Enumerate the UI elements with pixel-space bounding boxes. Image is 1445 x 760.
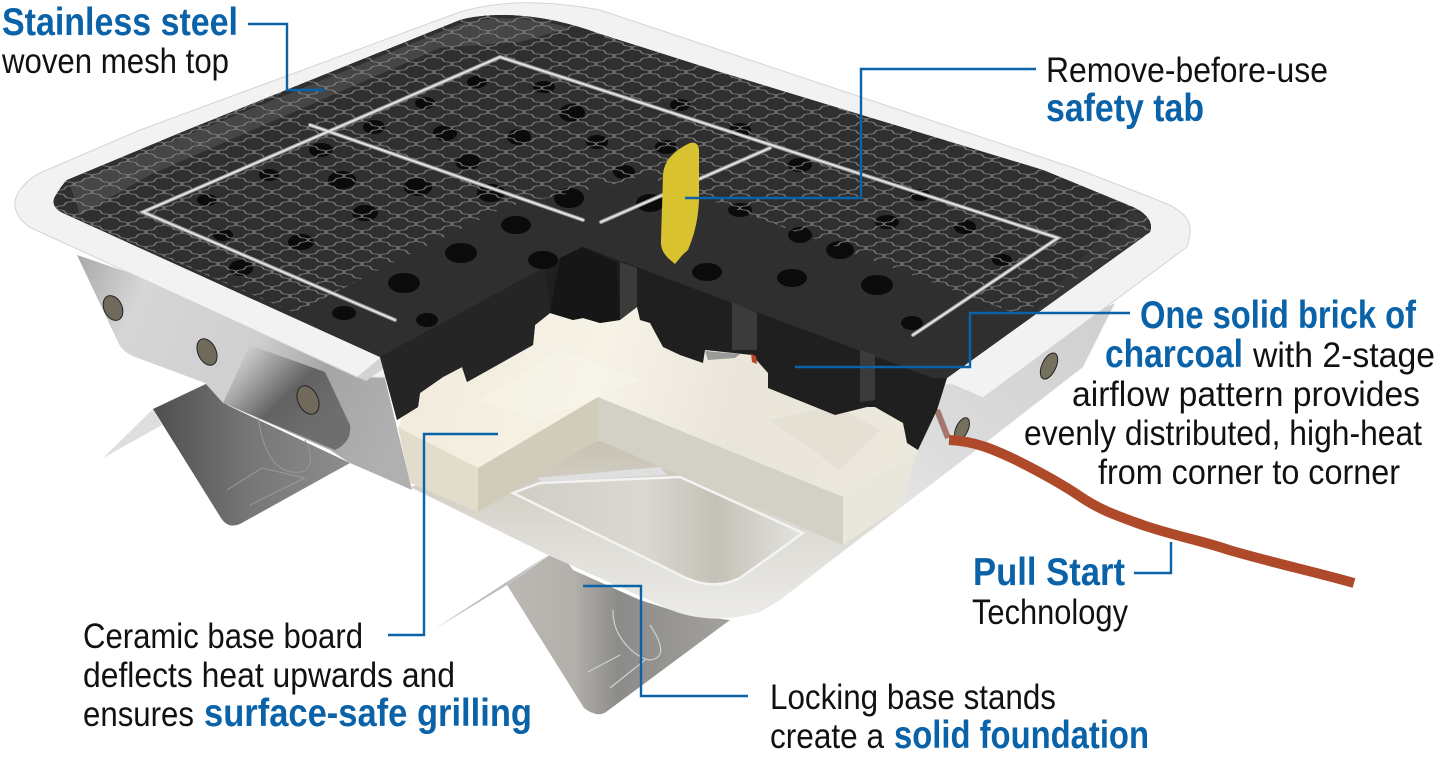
woven mesh top — [55, 16, 1150, 312]
airflow holes — [197, 76, 1012, 330]
callout: charcoal brick — [1024, 294, 1435, 492]
callout: ceramic base board: ensures — [83, 695, 194, 734]
callout: charcoal brick: airflow pattern provides — [1072, 375, 1420, 414]
callout: locking base stands: solid foundation — [894, 714, 1149, 757]
leader line: stainless steel — [248, 24, 325, 90]
leader line: locking base stands — [583, 586, 748, 696]
callout: locking base stands: create a — [770, 717, 884, 756]
left wall vent holes — [99, 292, 323, 418]
callout: locking base stands: Locking base stands — [770, 678, 1056, 717]
callout: pull start: Technology — [972, 593, 1128, 632]
charcoal brick — [54, 15, 1151, 450]
rim end highlight — [357, 358, 384, 381]
rim — [15, 3, 1190, 398]
callout: stainless steel: Stainless steel — [2, 1, 238, 44]
callout: safety tab — [1046, 51, 1328, 130]
callout: ceramic base board: surface-safe grilling — [204, 692, 532, 735]
callout: charcoal brick: charcoal — [1105, 333, 1243, 376]
leader line: safety tab — [685, 69, 1036, 198]
charcoal block side left — [380, 267, 550, 420]
copper detail and metal clip — [705, 351, 757, 364]
callout: ceramic base board — [83, 617, 532, 735]
callout: pull start — [972, 551, 1128, 632]
callout: stainless steel — [1, 1, 238, 81]
front locking base stand — [433, 549, 730, 714]
callout: pull start: Pull Start — [973, 551, 1125, 594]
callout: stainless steel: woven mesh top — [1, 42, 229, 81]
leader line: pull start — [1134, 542, 1171, 573]
pull start cord inside wall — [937, 410, 948, 438]
callout: locking base stands — [770, 678, 1149, 757]
central block — [550, 247, 620, 323]
tray floor — [410, 440, 900, 619]
right recessed band — [1030, 210, 1149, 318]
right side wall — [780, 303, 1115, 600]
pull start cord — [949, 440, 1354, 583]
leader line: ceramic base board — [388, 434, 498, 635]
pillars — [620, 262, 875, 402]
charcoal top surface — [54, 15, 1151, 378]
callout: ceramic base board: deflects heat upwards and — [83, 656, 455, 695]
leader line: charcoal — [795, 313, 1130, 367]
left side wall — [77, 255, 412, 490]
callout: safety tab: safety tab — [1046, 87, 1204, 130]
ceramic base board — [398, 300, 918, 545]
mesh support wires — [143, 57, 1058, 335]
callout: safety tab: Remove-before-use — [1046, 51, 1328, 90]
right wall vent holes — [951, 350, 1061, 442]
callout: charcoal brick: with 2-stage — [1252, 336, 1435, 375]
callout: ceramic base board: Ceramic base board — [83, 617, 363, 656]
callout: charcoal brick: from corner to corner — [1098, 453, 1400, 492]
inner pan — [513, 467, 803, 584]
rear locking base stand — [103, 382, 350, 526]
yellow safety tab — [661, 143, 699, 264]
upper-left shaded band — [70, 18, 570, 215]
